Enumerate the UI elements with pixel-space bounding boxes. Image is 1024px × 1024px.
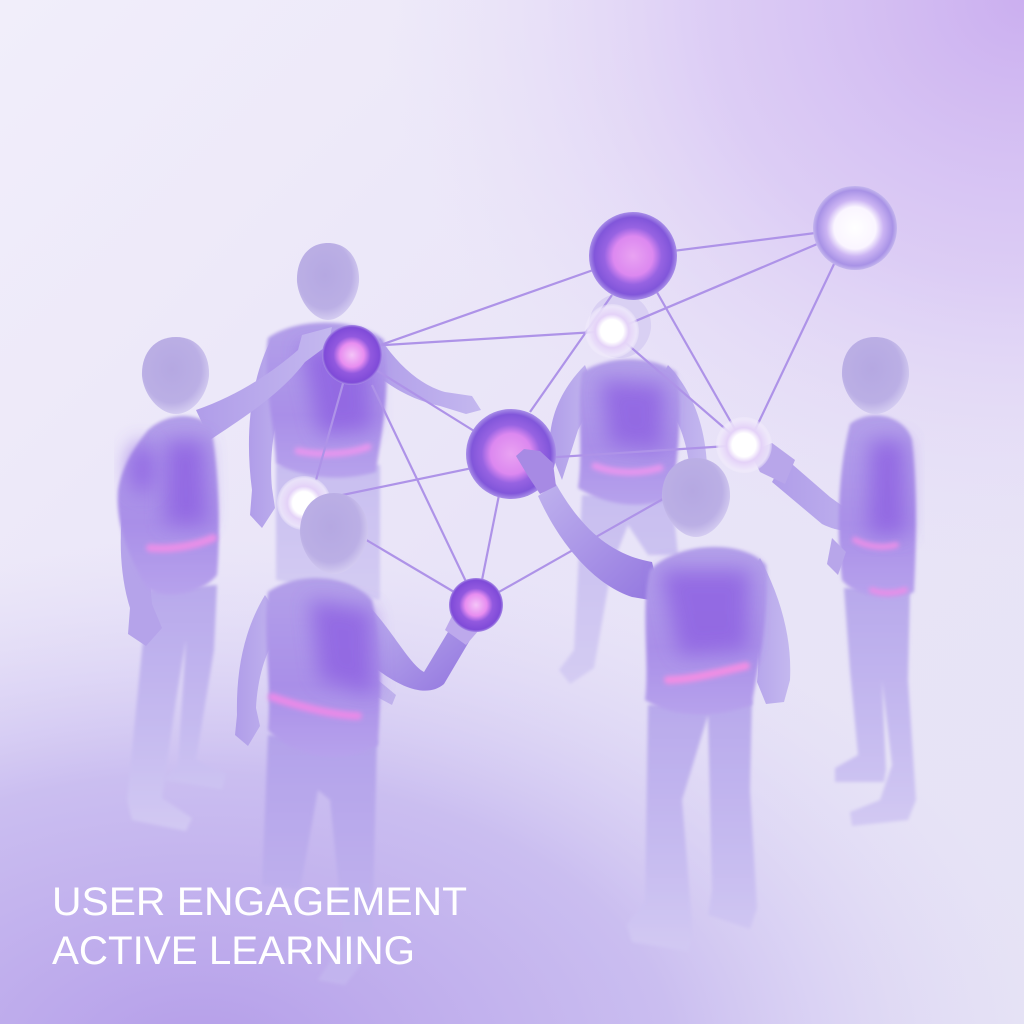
network node: glowing white centre	[585, 304, 639, 358]
title text	[52, 880, 467, 973]
network node: glowing white right	[716, 417, 772, 473]
network node: lower magenta	[449, 578, 503, 632]
network node: small white left	[277, 476, 331, 530]
figure: left person	[118, 327, 332, 831]
title text: USER ENGAGEMENT	[52, 880, 467, 924]
figure: front right person	[538, 458, 790, 951]
figure: right person	[750, 337, 916, 826]
network node: top large purple	[589, 212, 677, 300]
figure: front left person	[235, 493, 486, 985]
network node: upper left magenta	[322, 325, 382, 385]
figure: back centre-right person	[550, 294, 707, 684]
title text: ACTIVE LEARNING	[52, 929, 415, 973]
network node: top right white	[813, 186, 897, 270]
network node: central large purple	[466, 409, 556, 499]
figure: back centre-left person	[249, 243, 481, 705]
hand: front right person reaching node	[516, 449, 556, 494]
network links	[304, 228, 855, 605]
